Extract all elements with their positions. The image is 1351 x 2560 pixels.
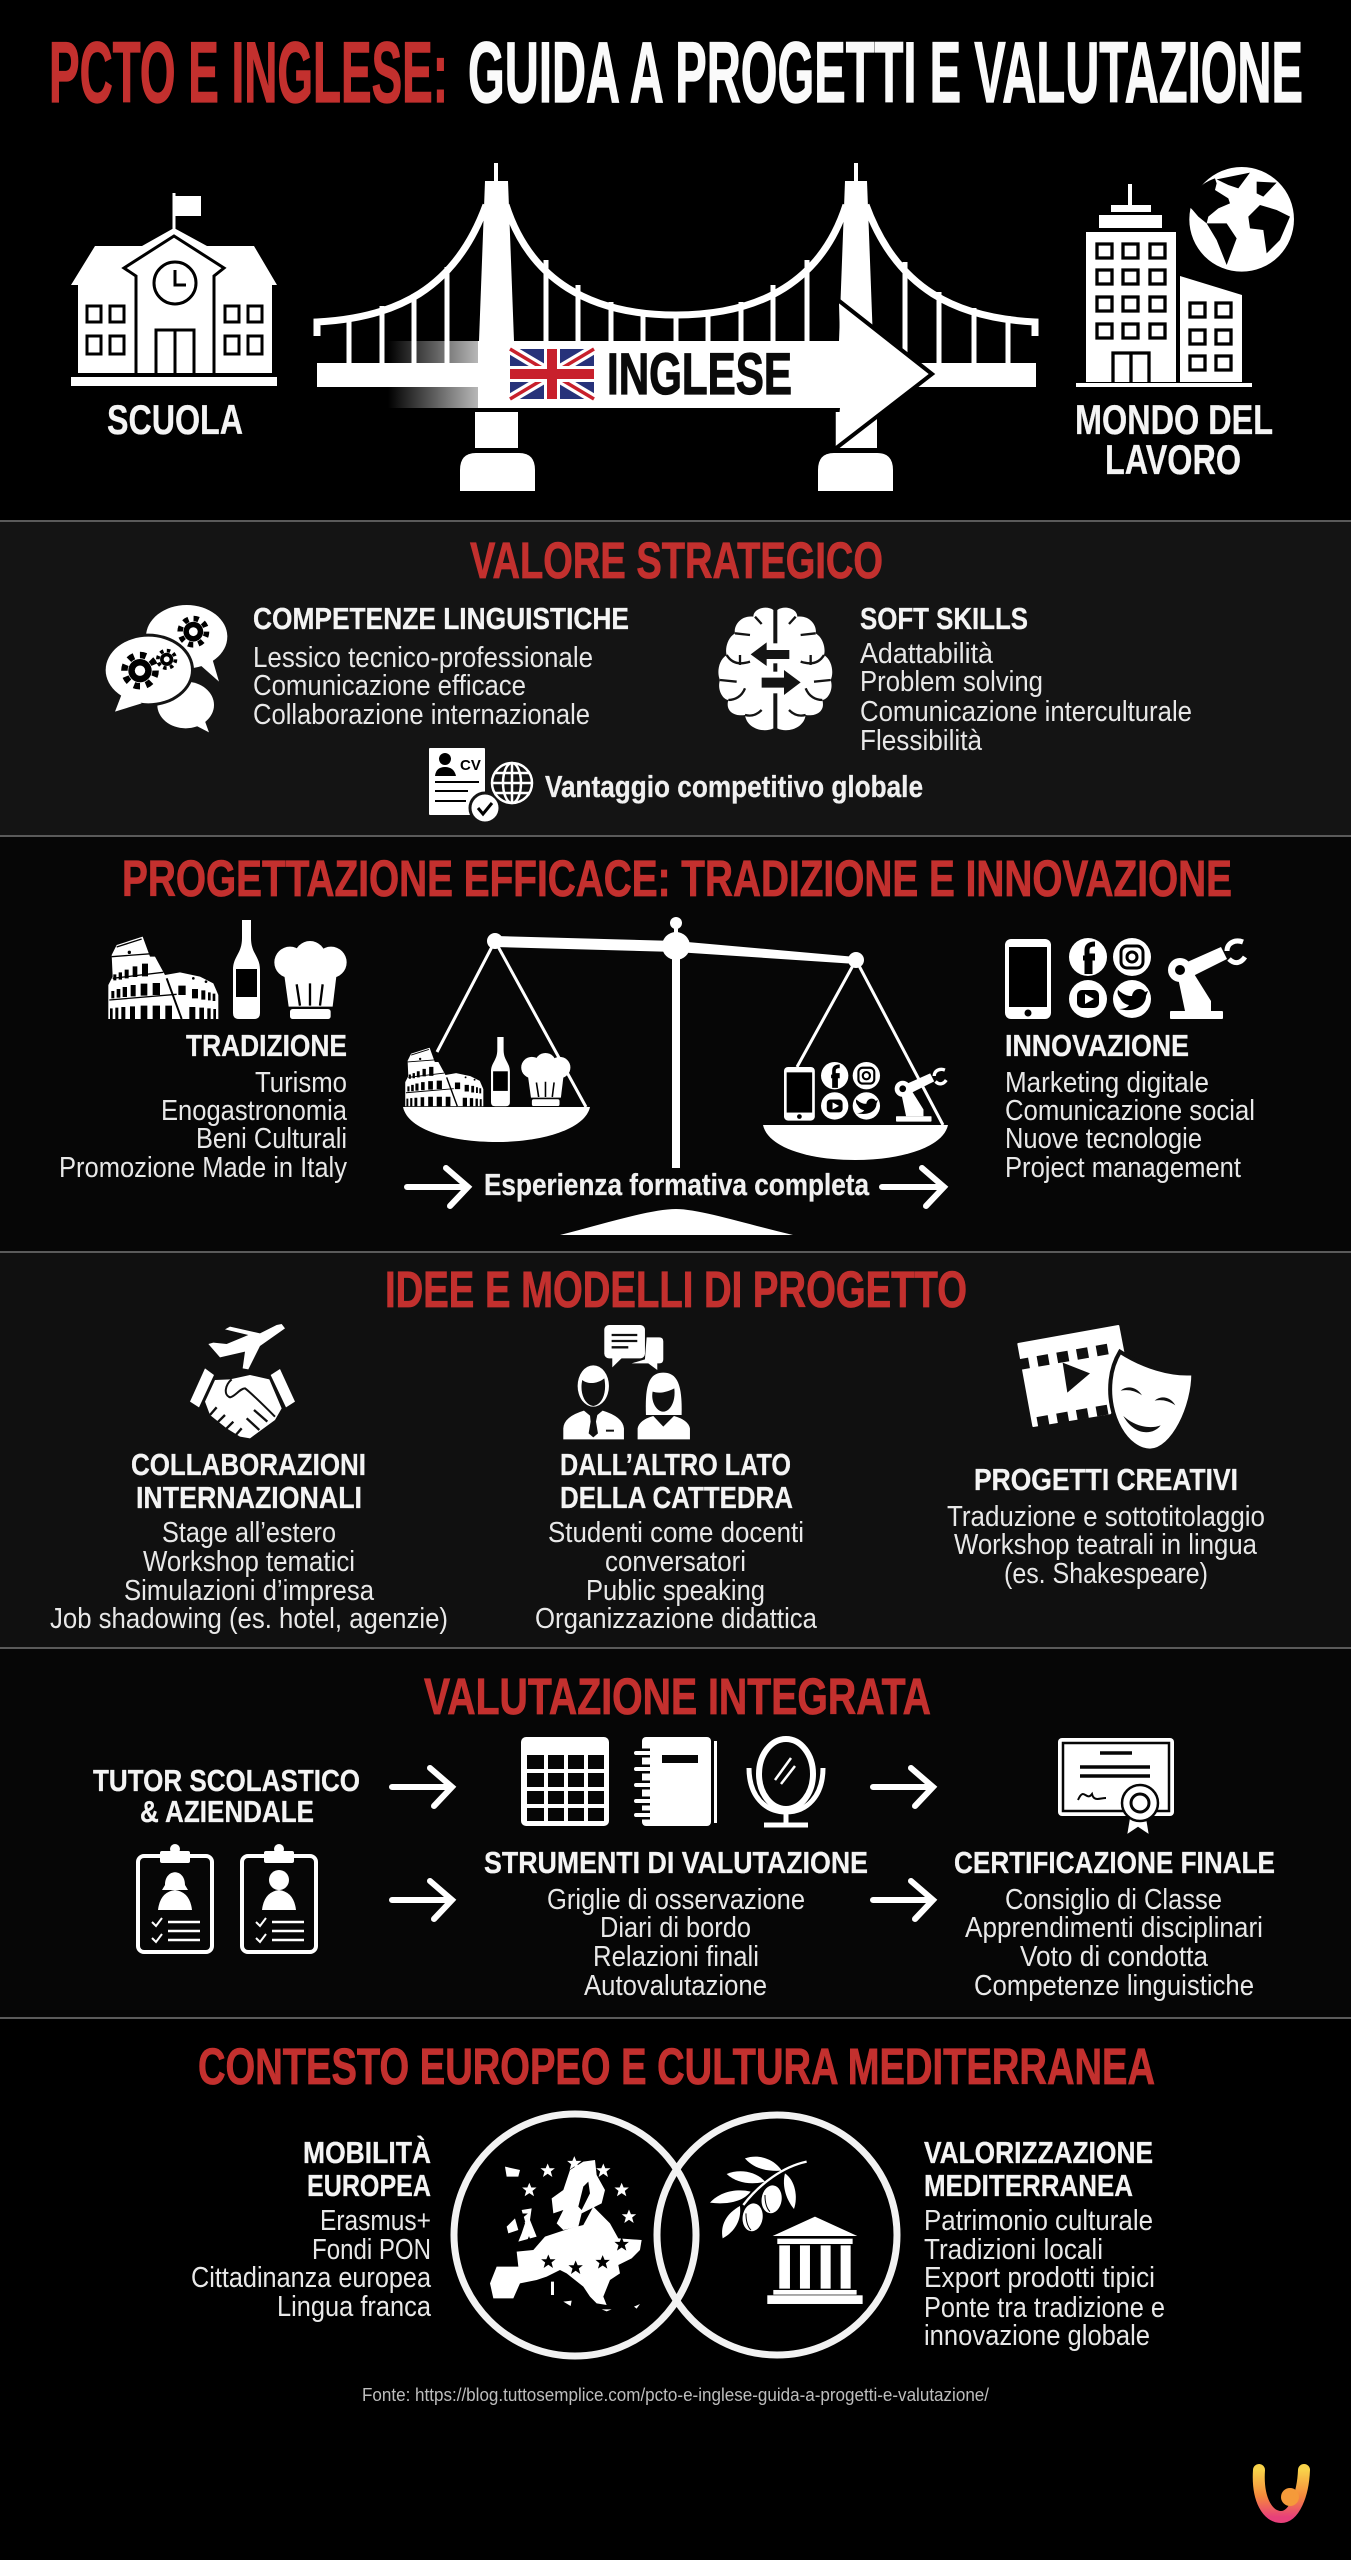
arrow: tools to certification top: [873, 1768, 933, 1806]
text: valorizzazione mediterranea: Export prodotti tipici: [924, 2262, 1155, 2294]
text: dall'altro lato della cattedra: DELLA CATTEDRA: [560, 1480, 793, 1515]
text: strumenti di valutazione: Autovalutazione: [584, 1970, 767, 2002]
label: esperienza formativa completa: Esperienza formativa completa: [484, 1167, 870, 1202]
callout: vantaggio competitivo: Vantaggio competitivo globale: [545, 769, 923, 804]
text: innovazione: INNOVAZIONE: [1005, 1028, 1189, 1063]
label: mondo del lavoro: LAVORO: [1105, 436, 1241, 483]
icon: europe map with stars: [490, 2156, 642, 2311]
text: dall'altro lato della cattedra: DALL’ALTRO LATO: [560, 1447, 791, 1482]
text: innovazione: Nuove tecnologie: [1005, 1123, 1202, 1155]
text: valorizzazione mediterranea: VALORIZZAZIONE: [924, 2135, 1153, 2170]
panel: valutazione integrata: [0, 1647, 1351, 2018]
text: certificazione finale: Consiglio di Classe: [1005, 1884, 1222, 1916]
text: innovazione: Comunicazione social: [1005, 1095, 1255, 1127]
arrow: right: [882, 1168, 944, 1206]
text: progetti creativi: (es. Shakespeare): [1004, 1558, 1208, 1590]
icon: mirror: [749, 1739, 823, 1825]
text: soft skills: Comunicazione interculturale: [860, 696, 1192, 728]
text: certificazione finale: Apprendimenti disciplinari: [965, 1912, 1263, 1944]
heading: VALUTAZIONE INTEGRATA: [424, 1668, 931, 1725]
text: soft skills: Adattabilità: [860, 638, 994, 670]
text: strumenti di valutazione: STRUMENTI DI VALUTAZIONE: [484, 1845, 868, 1880]
heading: VALORE STRATEGICO: [470, 532, 883, 589]
icons: tradizione: [108, 920, 347, 1019]
text: progetti creativi: PROGETTI CREATIVI: [974, 1462, 1238, 1497]
text: strumenti di valutazione: Diari di bordo: [600, 1912, 751, 1944]
text: dall'altro lato della cattedra: Organizzazione didattica: [535, 1603, 818, 1635]
text: tutor: [93, 1763, 360, 1829]
text: certificazione finale: Voto di condotta: [1020, 1941, 1209, 1973]
text: collaborazioni internazionali: COLLABORAZIONI: [131, 1447, 366, 1482]
text: valorizzazione mediterranea: Patrimonio culturale: [924, 2205, 1153, 2237]
icon: union jack: [510, 349, 594, 399]
text: competenze linguistiche: Collaborazione internazionale: [253, 699, 590, 731]
text: tradizione: Promozione Made in Italy: [59, 1152, 347, 1184]
text: soft skills: SOFT SKILLS: [860, 601, 1028, 636]
text: competenze linguistiche: [253, 601, 629, 731]
icon: brain: [718, 608, 832, 730]
label: inglese: INGLESE: [607, 342, 792, 407]
text: mobilità europea: Lingua franca: [277, 2291, 432, 2323]
text: tradizione: Turismo: [255, 1067, 347, 1099]
icon: plane and handshake: [190, 1324, 295, 1438]
panel: idee e modelli: [0, 1251, 1351, 1648]
text: dall'altro lato della cattedra: conversatori: [605, 1546, 746, 1578]
text: strumenti di valutazione: Griglie di osservazione: [547, 1884, 805, 1916]
text: innovazione: Project management: [1005, 1152, 1241, 1184]
text: mobilità europea: Erasmus+: [320, 2205, 431, 2237]
text: soft skills: Problem solving: [860, 666, 1043, 698]
panel: contesto europeo: [0, 2017, 1351, 2517]
text: tradizione: Beni Culturali: [196, 1123, 347, 1155]
text: progetti creativi: Traduzione e sottotitolaggio: [947, 1501, 1265, 1533]
text: mobilità europea: EUROPEA: [307, 2168, 431, 2203]
text: dall'altro lato della cattedra: [535, 1447, 818, 1635]
text: competenze linguistiche: Lessico tecnico-professionale: [253, 642, 593, 674]
icon: film strip and theatre mask: [1017, 1326, 1193, 1451]
text: soft skills: Flessibilità: [860, 725, 983, 757]
text: valorizzazione mediterranea: innovazione globale: [924, 2320, 1150, 2352]
text: valorizzazione mediterranea: MEDITERRANEA: [924, 2168, 1133, 2203]
text: tradizione: Enogastronomia: [161, 1095, 348, 1127]
panel: valore strategico: [0, 520, 1351, 836]
icon: cv and globe: CV: [460, 757, 481, 774]
icon: teacher and student: [563, 1325, 690, 1439]
text: collaborazioni internazionali: [50, 1447, 448, 1635]
text: mobilità europea: [191, 2135, 432, 2323]
text: valorizzazione mediterranea: [924, 2135, 1165, 2352]
label: mondo del lavoro: [1075, 396, 1273, 483]
text: collaborazioni internazionali: Job shadowing (es. hotel, agenzie): [50, 1603, 448, 1635]
icon: venn circles: [454, 2114, 897, 2356]
text: competenze linguistiche: Comunicazione efficace: [253, 670, 526, 702]
text: certificazione finale: CERTIFICAZIONE FINALE: [954, 1845, 1275, 1880]
icon: balance scale: [403, 917, 948, 1235]
panel: progettazione efficace: [0, 835, 1351, 1252]
arrow: tools to certification bottom: [873, 1881, 933, 1919]
text: valorizzazione mediterranea: Tradizioni locali: [924, 2234, 1103, 2266]
arrow: tutor to tools bottom: [392, 1881, 452, 1919]
text: competenze linguistiche: COMPETENZE LINGUISTICHE: [253, 601, 629, 636]
text: collaborazioni internazionali: Workshop tematici: [143, 1546, 355, 1578]
text: mobilità europea: Cittadinanza europea: [191, 2262, 432, 2294]
arrow: tutor to tools top: [392, 1768, 452, 1806]
text: innovazione: Marketing digitale: [1005, 1067, 1209, 1099]
icon: logo: [1259, 2470, 1304, 2517]
label: mondo del lavoro: MONDO DEL: [1075, 396, 1273, 443]
icon: olive branch and temple: [710, 2157, 863, 2304]
text: collaborazioni internazionali: Stage all’estero: [162, 1517, 336, 1549]
text: mobilità europea: Fondi PON: [312, 2234, 431, 2266]
text: soft skills: [860, 601, 1192, 757]
text: valorizzazione mediterranea: Ponte tra tradizione e: [924, 2292, 1165, 2324]
icon: school: [71, 193, 277, 386]
text: strumenti di valutazione: Relazioni finali: [593, 1941, 759, 1973]
text: dall'altro lato della cattedra: Public speaking: [586, 1575, 765, 1607]
text: tutor: & AZIENDALE: [140, 1794, 314, 1829]
panel: hero: [49, 25, 1303, 491]
text: certificazione finale: [954, 1845, 1275, 2002]
text: progetti creativi: Workshop teatrali in lingua: [954, 1529, 1258, 1561]
icon: cv and globe: [429, 748, 532, 823]
label: scuola: SCUOLA: [107, 396, 243, 443]
text: tutor: TUTOR SCOLASTICO: [93, 1763, 360, 1798]
text: innovazione: [1005, 1028, 1255, 1184]
title: PCTO E INGLESE:: [49, 25, 448, 121]
text: mobilità europea: MOBILITÀ: [303, 2135, 431, 2170]
icon: speech bubbles with gears: [103, 605, 227, 732]
icon: grid calendar: [521, 1737, 609, 1826]
icon: bridge with arrow: [317, 163, 1036, 491]
source line: Fonte: https://blog.tuttosemplice.com/pcto-e-inglese-guida-a-progetti-e-valutazione/: [362, 2385, 989, 2405]
text: tradizione: TRADIZIONE: [186, 1028, 347, 1063]
icons: innovazione: [1005, 938, 1245, 1019]
text: certificazione finale: Competenze linguistiche: [974, 1970, 1254, 2002]
title: [49, 25, 1303, 121]
text: progetti creativi: [947, 1462, 1265, 1590]
icon: certificate: [1058, 1738, 1174, 1836]
text: dall'altro lato della cattedra: Studenti come docenti: [548, 1517, 804, 1549]
icon: clipboards: [138, 1844, 316, 1952]
icon: office and globe: [1076, 167, 1294, 387]
arrow: left: [407, 1168, 468, 1206]
icon: notebook: [636, 1737, 717, 1826]
text: collaborazioni internazionali: INTERNAZIONALI: [136, 1480, 362, 1515]
text: tradizione: [59, 1028, 348, 1184]
heading: IDEE E MODELLI DI PROGETTO: [385, 1261, 967, 1318]
text: collaborazioni internazionali: Simulazioni d’impresa: [124, 1575, 375, 1607]
text: strumenti di valutazione: [484, 1845, 868, 2002]
